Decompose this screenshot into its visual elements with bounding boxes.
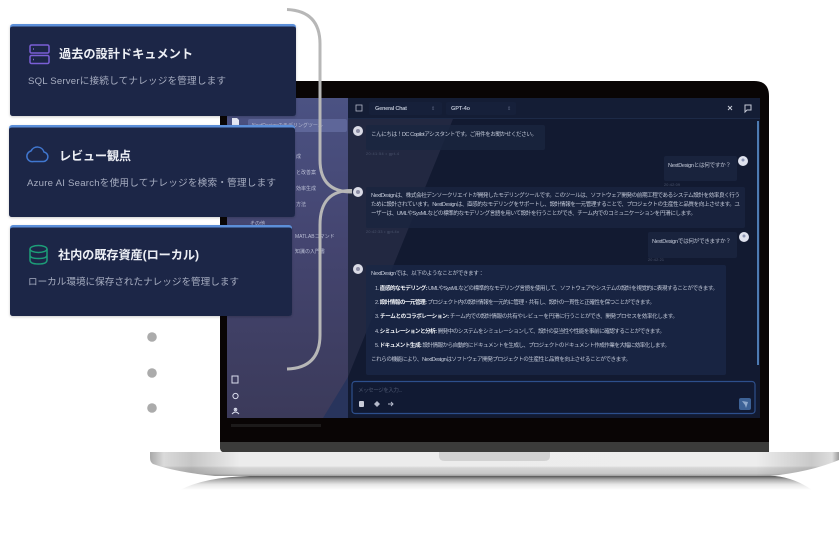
- card: レビュー観点: レビュー観点: [59, 148, 131, 163]
- message: answer 2: これらの機能により、NextDesignはソフトウェア開発プロジェクトの生産性と品質を向上させることができます。: [371, 355, 631, 363]
- chat header: ⇕: [431, 106, 435, 112]
- message: answer 1: 20:42:33 • gpt-4o: [366, 230, 399, 234]
- card: 社内の既存資産(ローカル): [10, 225, 292, 316]
- laptop: [150, 81, 839, 490]
- message: user question 1: 20:42:09: [664, 183, 680, 187]
- message input: [348, 377, 760, 418]
- chat header: General Chat: [375, 106, 407, 112]
- sidebar icons: [232, 376, 239, 414]
- chat header: GPT-4o: [451, 106, 471, 112]
- card: 過去の設計ドキュメント: [10, 24, 296, 116]
- card: 過去の設計ドキュメント: 過去の設計ドキュメント: [59, 46, 193, 61]
- message: user question 2: 20:42:21: [648, 258, 664, 262]
- chat header: ⇕: [507, 106, 511, 112]
- chat header: [348, 98, 760, 119]
- scrollbar: [757, 121, 759, 365]
- laptop base: [150, 452, 839, 476]
- icon: cloud: [27, 147, 48, 162]
- card: 社内の既存資産(ローカル): ローカル環境に保存されたナレッジを管理します: [28, 276, 239, 288]
- laptop lid: [220, 81, 769, 452]
- sidebar: と改善案: [296, 169, 316, 176]
- card: レビュー観点: Azure AI Searchを使用してナレッジを検索・管理します: [27, 177, 276, 189]
- chat wedge: [348, 119, 453, 377]
- message: answer 2: 5. ドキュメント生成: 設計情報から自動的にドキュメントを生成し、プロジェクトのドキュメント作成作業を大幅に効率化します。: [375, 341, 670, 349]
- message: answer 1: ために設計されています。NextDesignは、直感的なモデリングをサポートし、設計情報を一元管理することで、プロジェクトの生産性と品質を向上させます。ユ: [371, 200, 740, 208]
- message: answer 1: NextDesignは、株式会社デンソークリエイトが開発したモデリングツールです。このツールは、ソフトウェア開発の前期工程であるシステム設計を効率良く行う: [371, 191, 740, 199]
- message: answer 1: ーザーは、UMLやSysMLなどの標準的なモデリング言語を用いて設計を行うことができ、チーム内でのコミュニケーションを円滑にします。: [371, 209, 696, 217]
- message: answer 2: 4. シミュレーションと分析: 開発中のシステムをシミュレーションして、設計の妥当性や性能を事前に確認することができます。: [375, 327, 665, 335]
- screen: [227, 98, 760, 418]
- sidebar: NextDesignのモデリングツール: [252, 122, 323, 129]
- connector bracket: [287, 10, 352, 369]
- message: answer 2: [353, 264, 726, 375]
- message: answer 1: [353, 187, 745, 234]
- card: 過去の設計ドキュメント: SQL Serverに接続してナレッジを管理します: [28, 75, 226, 87]
- message: user question 1: NextDesignとは何ですか？: [668, 161, 731, 169]
- sidebar: 方法: [296, 201, 306, 208]
- sidebar: [227, 98, 348, 418]
- sidebar: MATLABコマンド: [295, 234, 335, 240]
- messages: [353, 125, 749, 375]
- dots: [147, 332, 157, 413]
- card: レビュー観点: [9, 125, 295, 217]
- message: answer 2: 1. 直感的なモデリング: UMLやSysMLなどの標準的なモデリング言語を使用して、ソフトウェアやシステムの設計を視覚的に表現することができます。: [375, 284, 718, 292]
- icon: server: [30, 45, 49, 64]
- message: answer 2: 3. チームとのコラボレーション: チーム内での設計情報の共有やレビューを円滑に行うことができ、開発プロセスを効率化します。: [375, 312, 678, 320]
- sidebar: 知識の入門書: [295, 248, 325, 255]
- sidebar: その他: [250, 220, 265, 227]
- message: answer 2: 2. 設計情報の一元管理: プロジェクト内の設計情報を一元的に管理・共有し、設計の一貫性と正確性を保つことができます。: [375, 298, 655, 306]
- sidebar: 効率生成: [296, 185, 316, 192]
- laptop shadow: [180, 476, 812, 490]
- message: user question 2: NextDesignでは何ができますか？: [652, 237, 731, 245]
- message: user question 1: [664, 156, 748, 187]
- card: 社内の既存資産(ローカル): 社内の既存資産(ローカル): [58, 247, 199, 262]
- message input: メッセージを入力...: [358, 386, 402, 394]
- message: greeting: こんにちは！DC Copilotアシスタントです。ご用件をお聞かせください。: [371, 130, 537, 138]
- message: greeting: [353, 125, 545, 156]
- message: greeting: 20:41:54 • gpt-4: [366, 152, 399, 156]
- message: user question 2: [648, 232, 749, 262]
- icon: database: [30, 246, 47, 264]
- message: answer 2: NextDesignでは、以下のようなことができます：: [371, 269, 484, 277]
- sidebar: 成: [296, 153, 301, 160]
